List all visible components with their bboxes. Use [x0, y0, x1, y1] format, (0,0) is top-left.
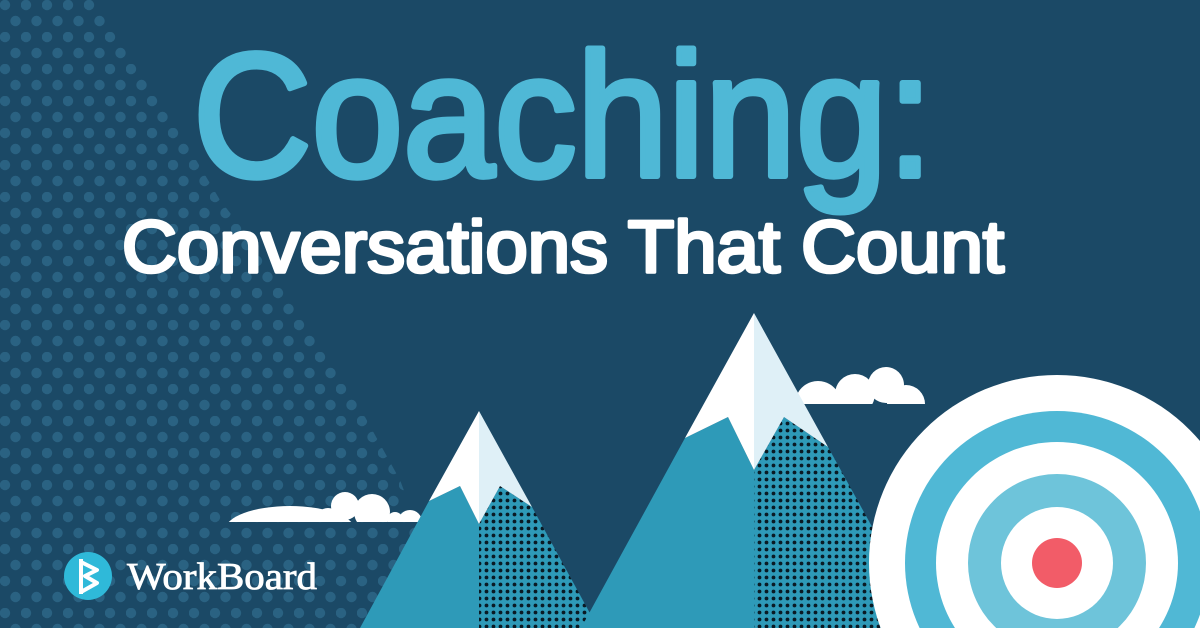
icon: logo mark [64, 552, 112, 600]
cloud: right [798, 367, 925, 404]
mountain: large [581, 313, 928, 628]
mountain: small [360, 411, 598, 628]
logo: WorkBoard [64, 552, 317, 600]
cloud: left [228, 492, 420, 522]
background dot pattern [0, 0, 450, 628]
subtitle: Conversations That Count [122, 207, 1004, 288]
target [869, 375, 1200, 628]
title: Coaching: [193, 18, 933, 214]
logo: WorkBoard: WorkBoard [127, 556, 317, 598]
